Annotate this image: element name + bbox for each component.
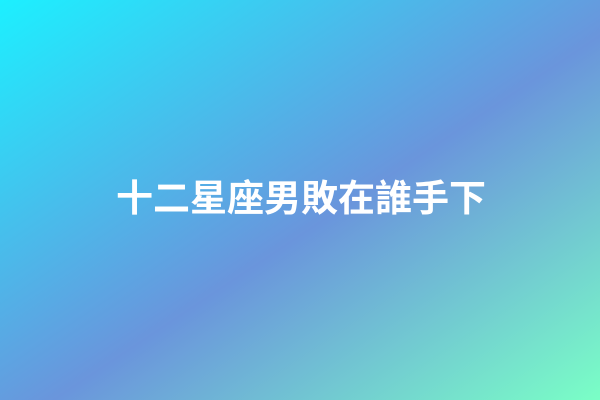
title: 十二星座男敗在誰手下	[116, 178, 486, 219]
